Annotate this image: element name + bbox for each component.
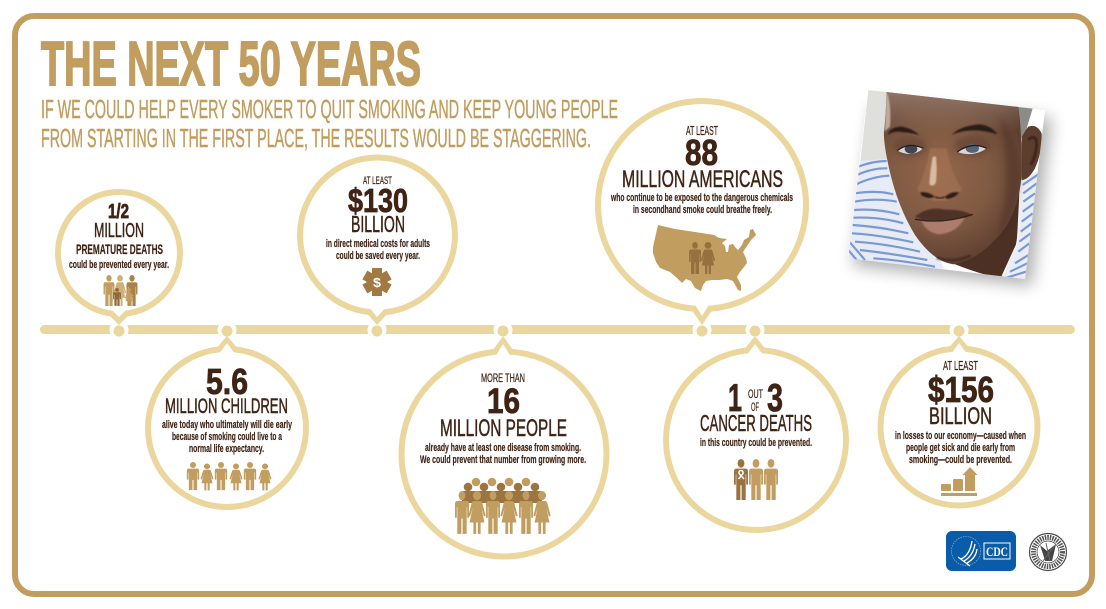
panel: $130 billion: BILLION xyxy=(351,211,405,237)
panel: $156 billion: AT LEAST xyxy=(943,358,978,373)
goatee xyxy=(937,256,971,260)
logo: public health service seal xyxy=(1030,534,1066,570)
panel: 1 out of 3 cancer deaths: OUT xyxy=(748,387,763,401)
face xyxy=(884,90,1022,264)
panel: 16 million people: We could prevent that number from growing more. xyxy=(420,454,586,466)
nose xyxy=(917,148,962,201)
panel: 1 out of 3 cancer deaths: 1 xyxy=(728,377,742,420)
panel: 1 out of 3 cancer deaths: OF xyxy=(751,400,759,414)
panel: 1 out of 3 cancer deaths: 3 xyxy=(767,377,783,420)
panel: 88 million Americans: MILLION AMERICANS xyxy=(622,166,783,193)
panel: 1 out of 3 cancer deaths: in this country could be prevented. xyxy=(700,437,812,449)
icon: medical dollar star: $ xyxy=(373,275,382,290)
panel: $130 billion: AT LEAST xyxy=(363,175,392,187)
panel: 88 million Americans: 88 xyxy=(685,132,718,173)
neck xyxy=(954,192,1020,276)
panel: $156 billion: $156 xyxy=(928,369,994,410)
panel: $156 billion: smoking—could be prevented. xyxy=(909,454,1012,466)
panel: half million premature deaths: could be prevented every year. xyxy=(69,259,169,271)
panel: $156 billion: BILLION xyxy=(929,403,992,430)
panel: 16 million people: 16 xyxy=(487,382,520,421)
eyes xyxy=(898,146,923,154)
icon: medical dollar star xyxy=(362,268,392,296)
background wall xyxy=(860,90,887,161)
panel: half million premature deaths xyxy=(58,192,180,325)
title: THE NEXT 50 YEARS xyxy=(41,30,421,99)
panel: 5.6 million children xyxy=(148,336,306,507)
panel: half million premature deaths: MILLION xyxy=(94,219,144,242)
panel: $130 billion: could be saved every year. xyxy=(336,250,420,262)
subheading: IF WE COULD HELP EVERY SMOKER TO QUIT SMOKING AND KEEP YOUNG PEOPLE xyxy=(41,96,618,124)
panel: half million premature deaths: 1/2 xyxy=(108,201,129,223)
panel: $156 billion xyxy=(880,336,1038,506)
logo: CDC: CDC xyxy=(986,544,1008,559)
panel: $130 billion: in direct medical costs for adults xyxy=(326,238,430,250)
panel: 16 million people: MORE THAN xyxy=(481,371,525,385)
icon: three people with ribbon xyxy=(734,459,778,500)
panel: half million premature deaths: PREMATURE DEATHS xyxy=(76,241,163,257)
icon: six children xyxy=(187,462,271,490)
panel: $156 billion: in losses to our economy—caused when xyxy=(895,430,1026,442)
icon: US map with people xyxy=(653,225,756,291)
icon: family xyxy=(104,275,137,306)
mouth xyxy=(915,208,972,220)
panel: 88 million Americans: who continue to be exposed to the dangerous chemicals xyxy=(610,192,793,204)
timeline xyxy=(40,320,1075,340)
panel: 5.6 million children: alive today who ultimately will die early xyxy=(162,419,293,431)
panel: 5.6 million children: because of smoking could live to a xyxy=(172,431,283,443)
panel: 88 million Americans: in secondhand smoke could breathe freely. xyxy=(633,204,772,216)
icon: rising bars with arrow xyxy=(941,467,978,496)
eye sockets xyxy=(893,137,927,157)
hair xyxy=(1015,105,1033,140)
panel: 5.6 million children: normal life expectancy. xyxy=(189,443,264,455)
panel: 1 out of 3 cancer deaths: CANCER DEATHS xyxy=(700,410,812,436)
panel: 88 million Americans xyxy=(598,101,806,325)
panel: $156 billion: people get sick and die early from xyxy=(906,442,1015,454)
panel: 88 million Americans: AT LEAST xyxy=(686,123,718,138)
panel: 16 million people xyxy=(402,336,606,556)
brows xyxy=(888,127,919,135)
shirt left xyxy=(847,158,947,275)
shirt right xyxy=(1004,171,1038,279)
icon: crowd xyxy=(455,478,551,534)
panel: 5.6 million children: MILLION CHILDREN xyxy=(165,395,288,418)
subheading xyxy=(41,96,618,153)
panel: $130 billion xyxy=(300,158,455,325)
photo: young man xyxy=(847,90,1052,286)
panel: 5.6 million children: 5.6 xyxy=(206,361,248,402)
panel: 16 million people: MILLION PEOPLE xyxy=(440,415,567,442)
subheading: FROM STARTING IN THE FIRST PLACE, THE RESULTS WOULD BE STAGGERING. xyxy=(41,125,591,153)
panel: 1 out of 3 cancer deaths xyxy=(666,336,846,530)
logo: CDC xyxy=(946,531,1016,571)
panel: $130 billion: $130 xyxy=(348,182,408,219)
ear xyxy=(1022,126,1042,180)
panel: 16 million people: already have at least one disease from smoking. xyxy=(425,442,581,454)
